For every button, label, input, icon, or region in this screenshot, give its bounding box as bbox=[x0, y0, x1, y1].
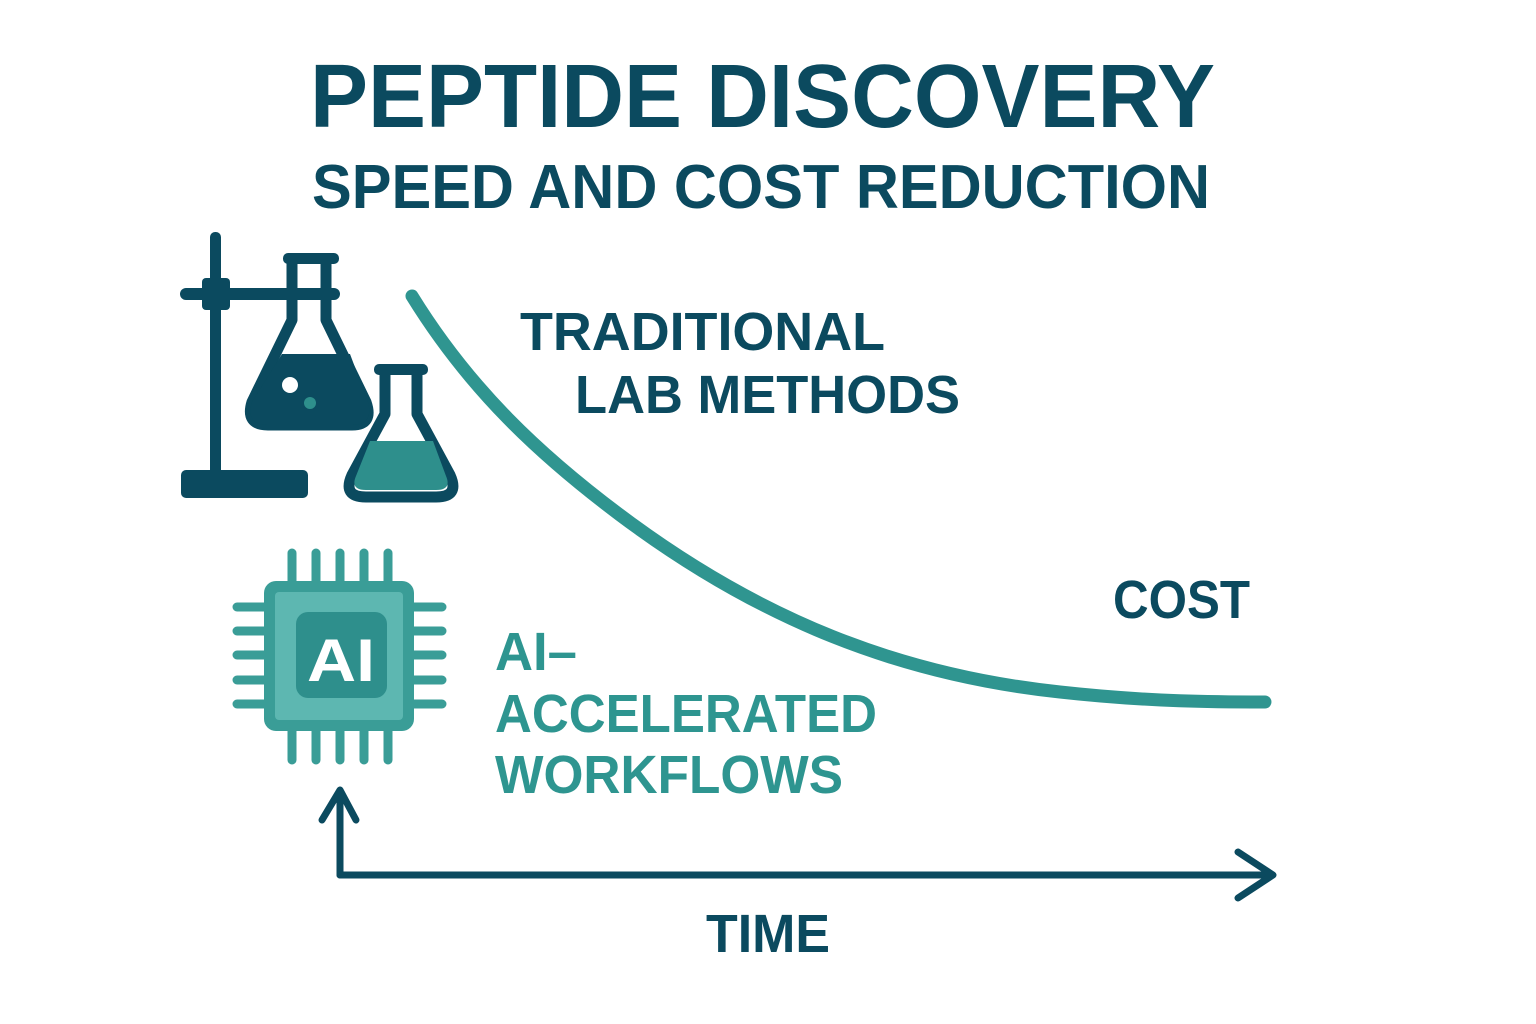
icon: lab stand with flasks bbox=[180, 232, 453, 498]
subtitle: SPEED AND COST REDUCTION bbox=[312, 153, 1210, 222]
label: traditional lab methods bbox=[520, 302, 960, 425]
label: AI-accelerated workflows: WORKFLOWS bbox=[495, 745, 843, 805]
label: traditional lab methods: LAB METHODS bbox=[575, 365, 960, 425]
label: AI-accelerated workflows: AI– bbox=[495, 622, 577, 682]
label: traditional lab methods: TRADITIONAL bbox=[520, 302, 885, 362]
label: AI-accelerated workflows: ACCELERATED bbox=[495, 684, 877, 744]
icon: AI chip: AI bbox=[307, 627, 375, 694]
cost curve bbox=[412, 296, 1265, 702]
label: time: TIME bbox=[706, 904, 830, 964]
label: cost: COST bbox=[1113, 570, 1250, 630]
title: PEPTIDE DISCOVERY bbox=[310, 47, 1215, 147]
axes arrows bbox=[322, 790, 1273, 898]
icon: AI chip bbox=[237, 553, 442, 760]
label: AI-accelerated workflows bbox=[495, 622, 877, 805]
